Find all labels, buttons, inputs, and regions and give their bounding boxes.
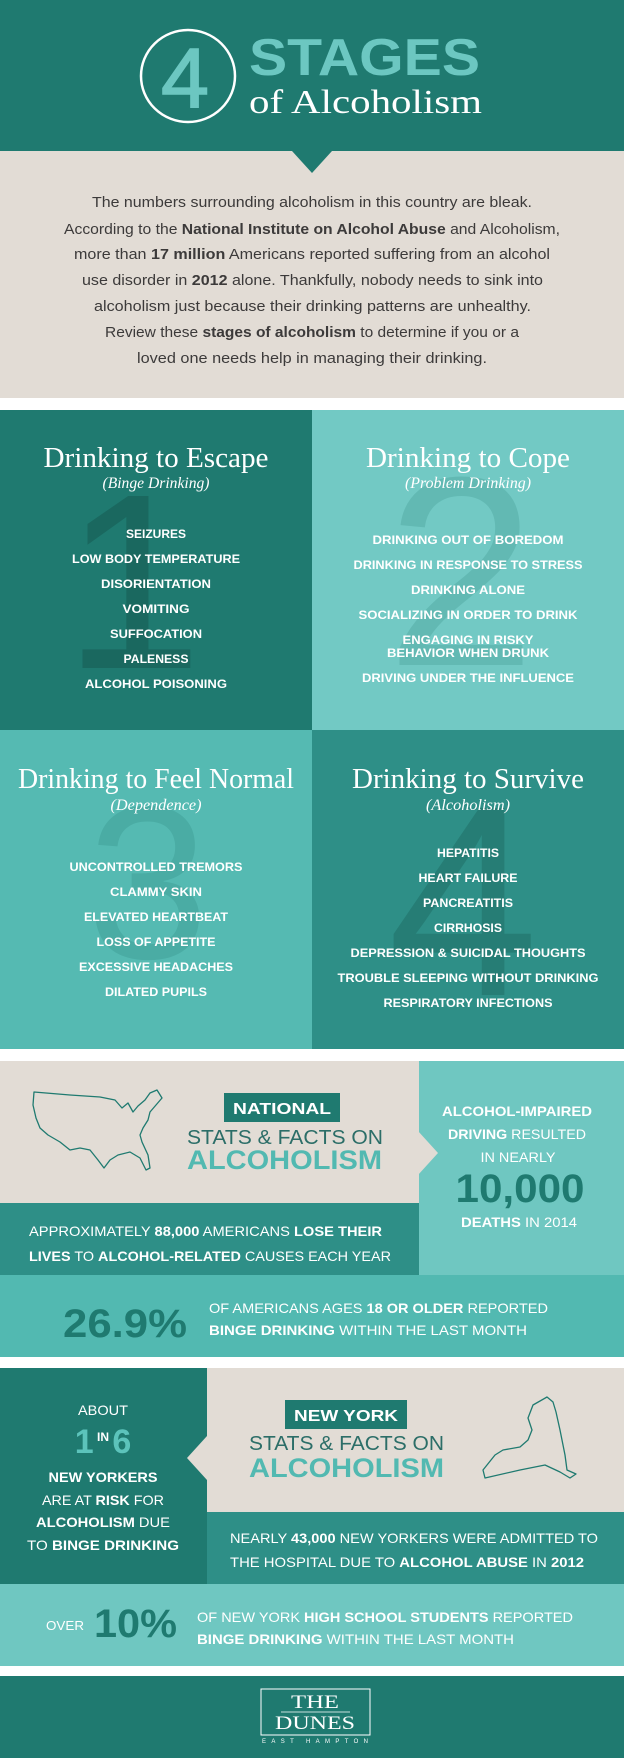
heading: national: NATIONAL — [233, 1101, 331, 1118]
callout: 43,000 hospital: NEARLY 43,000 NEW YORKERS WERE ADMITTED TO — [230, 1530, 598, 1546]
panel: stage 4: PANCREATITIS — [423, 896, 513, 910]
panel: stage 3: UNCONTROLLED TREMORS — [70, 860, 242, 874]
panel: stage 2: (Problem Drinking) — [405, 475, 531, 492]
panel: stage 3: 3 — [87, 762, 209, 1005]
callout: 10% students: 10% — [94, 1602, 177, 1646]
callout: 43,000 hospital: THE HOSPITAL DUE TO ALCOHOL ABUSE IN 2012 — [230, 1554, 584, 1570]
callout: 1 in 6: 1 — [75, 1423, 94, 1461]
title — [249, 29, 482, 121]
callout: 88,000 deaths — [0, 1203, 419, 1275]
callout: 26.9% binge: BINGE DRINKING WITHIN THE LAST MONTH — [209, 1322, 527, 1338]
panel: stage 4 — [312, 730, 624, 1053]
panel: stage 1: 1 — [63, 442, 203, 721]
callout: impaired driving: 10,000 — [456, 1167, 584, 1211]
intro text: Review these stages of alcoholism to determine if you or a — [105, 324, 520, 341]
panel: stage 1: VOMITING — [122, 602, 190, 616]
panel: stage 4: 4 — [387, 749, 539, 1053]
callout: 1 in 6: TO BINGE DRINKING — [27, 1537, 179, 1553]
callout: 1 in 6: 6 — [112, 1423, 131, 1461]
panel: stage 2 — [312, 410, 624, 730]
intro text: alcoholism just because their drinking patterns are unhealthy. — [94, 298, 531, 315]
callout: 10% students: OVER — [46, 1618, 84, 1633]
panel: stage 3 — [0, 730, 312, 1049]
panel: stage 2: ENGAGING IN RISKY — [402, 633, 534, 647]
panel: stage 1: LOW BODY TEMPERATURE — [72, 552, 240, 566]
logo — [261, 1689, 370, 1745]
intro text: According to the National Institute on Alcohol Abuse and Alcoholism, — [64, 221, 560, 238]
callout: impaired driving: DRIVING RESULTED — [448, 1126, 586, 1142]
callout: 1 in 6: ABOUT — [78, 1402, 128, 1418]
panel: stage 3: (Dependence) — [110, 797, 202, 814]
callout: 88,000 deaths: APPROXIMATELY 88,000 AMERICANS LOSE THEIR — [29, 1223, 382, 1239]
callout: 10% students: BINGE DRINKING WITHIN THE LAST MONTH — [197, 1631, 514, 1647]
callout: impaired driving: ALCOHOL-IMPAIRED — [442, 1103, 592, 1119]
header — [0, 0, 624, 151]
panel: stage 2: DRIVING UNDER THE INFLUENCE — [362, 671, 574, 685]
intro text: more than 17 million Americans reported suffering from an alcohol — [74, 246, 550, 263]
panel: stage 4: HEART FAILURE — [418, 871, 518, 885]
panel: stage 4: (Alcoholism) — [426, 797, 510, 814]
callout: 1 in 6: ARE AT RISK FOR — [42, 1492, 164, 1508]
callout: 1 in 6: IN — [94, 1430, 112, 1444]
panel: stage 4: TROUBLE SLEEPING WITHOUT DRINKING — [338, 971, 598, 985]
intro text: use disorder in 2012 alone. Thankfully, nobody needs to sink into — [82, 272, 543, 289]
heading: new york: ALCOHOLISM — [249, 1453, 444, 1483]
panel: stage 2: DRINKING IN RESPONSE TO STRESS — [354, 558, 582, 572]
panel: stage 1: SEIZURES — [126, 527, 186, 541]
heading: new york — [249, 1400, 444, 1483]
callout: impaired driving: DEATHS IN 2014 — [461, 1214, 577, 1230]
heading: national: STATS & FACTS ON — [187, 1127, 383, 1149]
panel: stage 3: EXCESSIVE HEADACHES — [79, 960, 233, 974]
title: of Alcoholism — [249, 84, 482, 121]
heading: new york: STATS & FACTS ON — [249, 1433, 444, 1455]
panel: stage 2: 2 — [386, 422, 536, 723]
panel: stage 1: (Binge Drinking) — [102, 475, 210, 492]
panel: stage 3: LOSS OF APPETITE — [96, 935, 216, 949]
panel: stage 3: Drinking to Feel Normal — [18, 764, 294, 795]
panel: stage 1: DISORIENTATION — [101, 577, 211, 591]
panel: stage 2: SOCIALIZING IN ORDER TO DRINK — [358, 608, 578, 622]
panel: stage 1: PALENESS — [124, 652, 188, 666]
icon: US map — [33, 1090, 162, 1170]
logo: THE — [291, 1692, 339, 1713]
callout: impaired driving: IN NEARLY — [480, 1149, 556, 1165]
footer — [0, 1676, 624, 1758]
icon: circle with 4 — [141, 30, 235, 125]
intro text: loved one needs help in managing their drinking. — [137, 350, 487, 367]
panel: stage 1: SUFFOCATION — [110, 627, 202, 641]
callout: 43,000 hospital — [207, 1512, 624, 1584]
panel: stage 3: CLAMMY SKIN — [110, 885, 202, 899]
panel: stage 4: HEPATITIS — [437, 846, 499, 860]
title: STAGES — [249, 29, 480, 87]
icon: circle with 4: 4 — [161, 31, 209, 125]
panel: stage 1 — [0, 410, 312, 730]
callout: 88,000 deaths: LIVES TO ALCOHOL-RELATED CAUSES EACH YEAR — [29, 1248, 391, 1264]
panel: stage 2: DRINKING OUT OF BOREDOM — [372, 533, 564, 547]
panel: stage 2: Drinking to Cope — [366, 443, 570, 474]
panel: stage 1: Drinking to Escape — [44, 443, 268, 474]
callout: 10% students — [0, 1584, 624, 1666]
panel: stage 4: CIRRHOSIS — [434, 921, 502, 935]
callout: 26.9% binge: OF AMERICANS AGES 18 OR OLDER REPORTED — [209, 1300, 548, 1316]
heading: national: ALCOHOLISM — [187, 1145, 382, 1175]
panel: stage 4: DEPRESSION & SUICIDAL THOUGHTS — [350, 946, 586, 960]
intro panel — [0, 151, 624, 398]
panel: national stats — [0, 1061, 419, 1203]
panel: stage 1: ALCOHOL POISONING — [85, 677, 227, 691]
intro text — [64, 194, 560, 367]
logo: EAST HAMPTON — [262, 1739, 368, 1745]
panel: stage 2: DRINKING ALONE — [411, 583, 525, 597]
heading: national — [187, 1093, 383, 1175]
panel: stage 4: Drinking to Survive — [352, 764, 584, 795]
icon: NY map — [483, 1397, 576, 1478]
panel: stage 3: DILATED PUPILS — [105, 985, 207, 999]
callout: 1 in 6: ALCOHOLISM DUE — [36, 1514, 170, 1530]
callout: 26.9% binge — [0, 1275, 624, 1357]
callout: 1 in 6: NEW YORKERS — [48, 1469, 158, 1485]
callout: 26.9% binge: 26.9% — [63, 1302, 187, 1346]
panel: new york stats — [207, 1368, 624, 1512]
panel: stage 2: BEHAVIOR WHEN DRUNK — [387, 646, 549, 660]
panel: stage 4: RESPIRATORY INFECTIONS — [384, 996, 552, 1010]
intro text: The numbers surrounding alcoholism in this country are bleak. — [92, 194, 532, 211]
logo: DUNES — [275, 1713, 355, 1734]
callout: 10% students: OF NEW YORK HIGH SCHOOL STUDENTS REPORTED — [197, 1609, 573, 1625]
callout: 1 in 6 — [0, 1368, 207, 1584]
heading: new york: NEW YORK — [294, 1408, 399, 1425]
panel: stage 3: ELEVATED HEARTBEAT — [84, 910, 229, 924]
callout: impaired driving — [418, 1061, 624, 1275]
